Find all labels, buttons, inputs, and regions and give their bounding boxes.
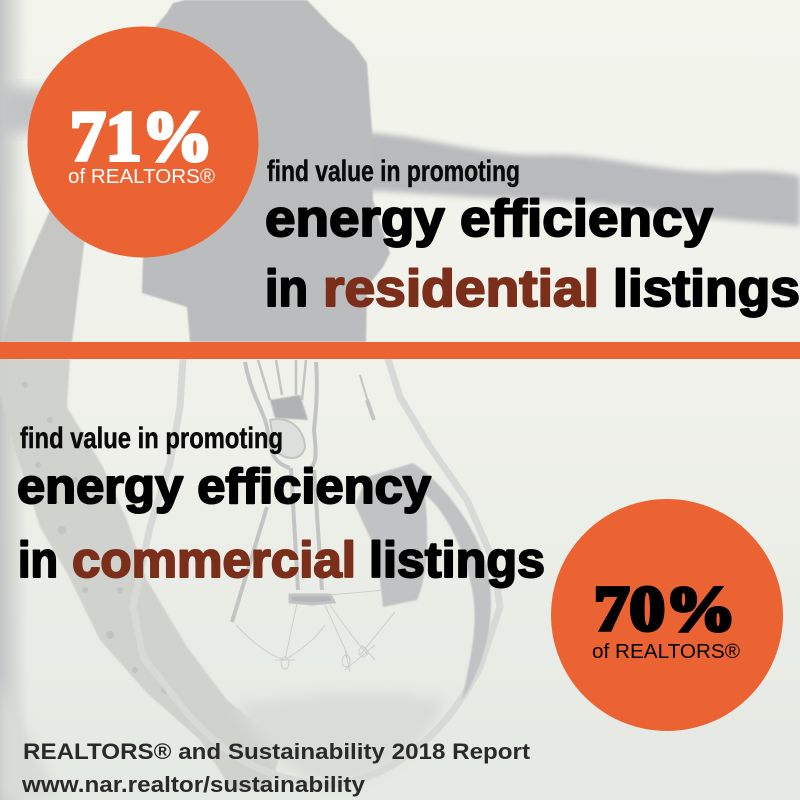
text block: residential statement (265, 155, 800, 318)
heading: in residential listings: listings (613, 260, 800, 318)
source footer: www.nar.realtor/sustainability (21, 772, 366, 797)
circle callout: 71% of REALTORS (28, 26, 258, 258)
lead-in: find value in promoting: find value in promoting (20, 422, 283, 455)
source footer: REALTORS® and Sustainability 2018 Report (23, 739, 531, 764)
circle callout: 70% of REALTORS (551, 499, 783, 731)
heading: in commercial listings: listings (369, 532, 545, 588)
orange divider bar (0, 342, 800, 359)
stat: 70%: 70% (594, 573, 736, 644)
background: dark reflection inside bulb (355, 463, 491, 700)
heading: energy efficiency: energy efficiency (17, 460, 431, 514)
background: glass bulb outline (133, 359, 500, 785)
text block: commercial statement (17, 422, 545, 588)
background: cloth cord (0, 210, 283, 790)
background: lamp socket (142, 0, 390, 342)
heading: in commercial listings (18, 532, 545, 588)
background: filament support (232, 360, 395, 672)
background: horizontal shadow band (360, 132, 800, 226)
source footer (21, 739, 531, 797)
heading: in residential listings (265, 260, 800, 318)
heading: in residential listings: in (265, 260, 308, 318)
heading: in residential listings: residential (323, 260, 599, 318)
lead-in: find value in promoting: find value in promoting (267, 155, 520, 188)
stat: 71%: 71% (70, 98, 213, 176)
background: soft shade at bulb bottom (235, 692, 445, 785)
heading: in commercial listings: commercial (72, 532, 356, 588)
heading: energy efficiency: energy efficiency (265, 190, 713, 248)
heading: in commercial listings: in (18, 532, 58, 588)
label: of REALTORS bottom: of REALTORS® (592, 641, 740, 663)
label: of REALTORS top: of REALTORS® (68, 166, 215, 188)
